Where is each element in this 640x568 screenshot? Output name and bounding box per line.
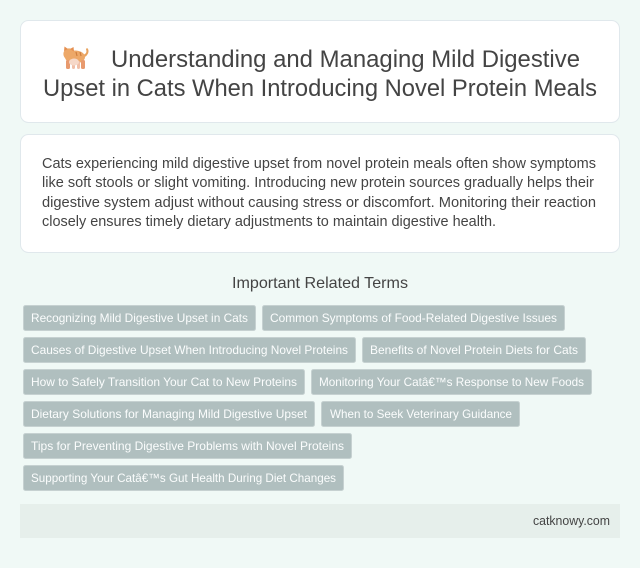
panel: description <box>20 134 620 252</box>
tag: Benefits of Novel Protein Diets for Cats <box>370 343 578 357</box>
tag <box>362 338 586 362</box>
description text: Cats experiencing mild digestive upset from novel protein meals often show symptoms <box>42 156 596 172</box>
title text <box>43 46 597 102</box>
tag: Supporting Your Catâ€™s Gut Health During Diet Changes <box>31 471 336 485</box>
tag: When to Seek Veterinary Guidance <box>330 407 512 421</box>
tag <box>24 466 344 490</box>
tag <box>24 338 356 362</box>
footer source: catknowy.com <box>533 514 610 528</box>
title text: Understanding and Managing Mild Digestive <box>111 46 580 73</box>
tag: How to Safely Transition Your Cat to New Proteins <box>31 375 297 389</box>
tag <box>262 306 564 330</box>
tag <box>312 370 592 394</box>
description text: like soft stools or slight vomiting. Introducing new protein sources gradually helps their <box>42 175 594 191</box>
tag <box>24 402 314 426</box>
tag <box>322 402 520 426</box>
tag: Causes of Digestive Upset When Introducing Novel Proteins <box>31 343 348 357</box>
description text <box>42 156 596 230</box>
tag: Monitoring Your Catâ€™s Response to New Foods <box>319 375 584 389</box>
tag <box>24 434 352 458</box>
tag: Recognizing Mild Digestive Upset in Cats <box>31 311 248 325</box>
title panel <box>20 20 620 122</box>
tag: Common Symptoms of Food-Related Digestive Issues <box>270 311 557 325</box>
description text: digestive system adjust without causing stress or discomfort. Monitoring their reaction <box>42 195 596 211</box>
heading: related terms: Important Related Terms <box>232 275 408 292</box>
tag <box>24 306 256 330</box>
tag: Tips for Preventing Digestive Problems with Novel Proteins <box>31 439 344 453</box>
panel: related term tags <box>24 306 592 490</box>
title text: Upset in Cats When Introducing Novel Protein Meals <box>43 75 597 102</box>
icon: cat <box>63 46 88 69</box>
tag: Dietary Solutions for Managing Mild Digestive Upset <box>31 407 308 421</box>
description text: closely ensures timely dietary adjustments to maintain digestive health. <box>42 214 496 230</box>
tag <box>24 370 304 394</box>
footer bar <box>20 504 620 538</box>
